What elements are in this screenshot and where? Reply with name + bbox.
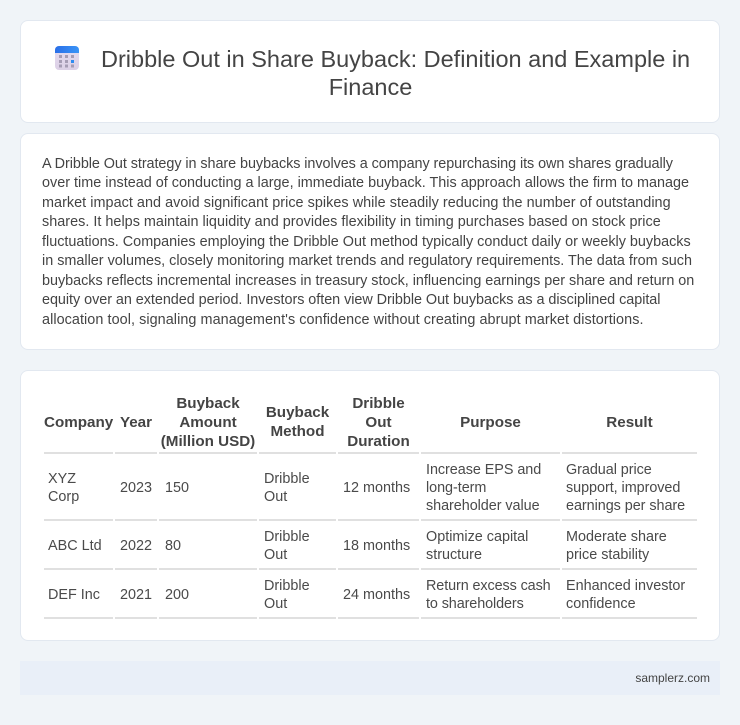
row: DEF Inc: Out: [264, 596, 287, 612]
row: ABC Ltd: 2022: [120, 538, 152, 554]
row: XYZ Corp: Increase EPS and: [426, 462, 541, 478]
header: Buyback Method: [266, 404, 330, 440]
header: Dribble Out Duration: Out: [365, 414, 392, 431]
header: Dribble Out Duration: [347, 395, 410, 450]
row: DEF Inc: confidence: [566, 596, 636, 612]
header: Company: Company: [44, 414, 113, 431]
header: Buyback Amount: (Million USD): [161, 433, 255, 450]
footer text: samplerz.com: [635, 671, 710, 685]
row: ABC Ltd: [48, 529, 667, 563]
row: DEF Inc: 200: [165, 587, 189, 603]
row: ABC Ltd: Optimize capital: [426, 529, 528, 545]
text block: description: fluctuations. Companies employing the Dribble Out method typically conduct daily or weekly buybacks: [42, 234, 691, 250]
row: XYZ Corp: Dribble: [264, 471, 310, 487]
row: DEF Inc: Dribble: [264, 578, 310, 594]
row: DEF Inc: Return excess cash: [426, 578, 551, 594]
panel: data table: [20, 370, 720, 641]
row: XYZ Corp: earnings per share: [566, 498, 685, 514]
text block: description: shares. It helps maintain liquidity and provides flexibility in timing purchases based on stock price: [42, 214, 661, 230]
header: Buyback Amount: Buyback: [176, 395, 240, 412]
row: ABC Ltd: 18 months: [343, 538, 410, 554]
row: XYZ Corp: Out: [264, 489, 287, 505]
title: [101, 46, 690, 100]
row: XYZ Corp: 2023: [120, 480, 152, 496]
text block: description: A Dribble Out strategy in share buybacks involves a company repurchasing its own shares gradually: [42, 156, 673, 172]
row: XYZ Corp: long-term: [426, 480, 486, 496]
header: Year: Year: [120, 414, 152, 431]
row: XYZ Corp: [48, 462, 685, 514]
row: DEF Inc: 2021: [120, 587, 152, 603]
row: XYZ Corp: 150: [165, 480, 189, 496]
header: Result: Result: [606, 414, 653, 431]
row: DEF Inc: [48, 578, 685, 612]
row: DEF Inc: to shareholders: [426, 596, 524, 612]
row: ABC Ltd: ABC Ltd: [48, 538, 102, 554]
row: XYZ Corp: Corp: [48, 489, 79, 505]
row: XYZ Corp: support, improved: [566, 480, 680, 496]
row: DEF Inc: Enhanced investor: [566, 578, 685, 594]
row: XYZ Corp: Gradual price: [566, 462, 652, 478]
header: Buyback Method: Method: [270, 423, 324, 440]
icon: calendar: [55, 46, 79, 70]
row: DEF Inc: 24 months: [343, 587, 410, 603]
header: Buyback Amount: [161, 395, 255, 450]
header: Dribble Out Duration: Duration: [347, 433, 410, 450]
row: XYZ Corp: 12 months: [343, 480, 410, 496]
panel: description: [20, 133, 720, 350]
title: Dribble Out in Share Buyback: Definition and Example in: [101, 46, 690, 72]
text block: description: over time instead of conducting a large, immediate buyback. This approach allows the firm to manage: [42, 175, 689, 191]
row: ABC Ltd: Dribble: [264, 529, 310, 545]
header: Buyback Amount: Amount: [179, 414, 237, 431]
row: ABC Ltd: 80: [165, 538, 181, 554]
panel: title header: [20, 20, 720, 123]
header: Dribble Out Duration: Dribble: [352, 395, 405, 412]
header: Buyback Method: Buyback: [266, 404, 329, 421]
row: DEF Inc: DEF Inc: [48, 587, 100, 603]
row: ABC Ltd: price stability: [566, 547, 649, 563]
footer bar: [20, 661, 720, 695]
row: XYZ Corp: XYZ: [48, 471, 76, 487]
text block: description: market impact and avoid significant price spikes while steadily reducing the number of outstanding: [42, 195, 671, 211]
title: Finance: [329, 74, 412, 100]
text block: description: allocation tool, signaling management's confidence without creating abrupt market distortions.: [42, 312, 644, 328]
row: ABC Ltd: Moderate share: [566, 529, 667, 545]
table: [44, 395, 697, 619]
text block: description: buybacks reflects incremental increases in treasury stock, influencing earnings per share and return on: [42, 273, 694, 289]
row: ABC Ltd: Out: [264, 547, 287, 563]
row: ABC Ltd: structure: [426, 547, 482, 563]
text block: description: in smaller volumes, closely monitoring market trends and regulatory requirements. The data from such: [42, 253, 692, 269]
text block: description: equity over an extended period. Investors often view Dribble Out buybacks as a disciplined capital: [42, 292, 660, 308]
text block: description: [42, 156, 694, 328]
header: Purpose: Purpose: [460, 414, 521, 431]
row: XYZ Corp: shareholder value: [426, 498, 540, 514]
